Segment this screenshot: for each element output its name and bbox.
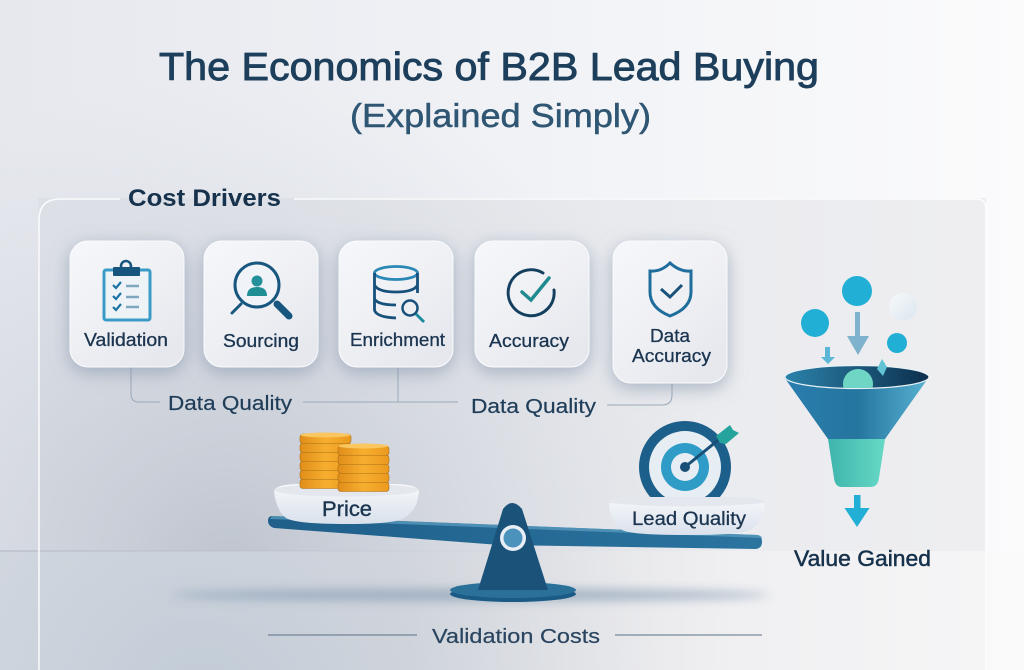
right pan [609, 497, 765, 535]
card: sourcing [204, 241, 318, 367]
label: data quality right: Data Quality [471, 396, 596, 418]
card: validation [70, 241, 184, 367]
scale [268, 421, 765, 602]
label: validation: Validation [84, 330, 168, 350]
falling diamond [877, 359, 887, 376]
label: data accuracy [632, 326, 711, 366]
panel: cost drivers frame [39, 199, 986, 670]
icon: shield check [650, 263, 691, 316]
icon: magnifier with person [232, 263, 289, 316]
label: data accuracy: Accuracy [632, 346, 711, 366]
fulcrum [478, 503, 548, 590]
arrows into funnel [821, 312, 869, 364]
funnel spout [828, 439, 885, 487]
label: accuracy: Accuracy [489, 331, 569, 351]
label: enrichment: Enrichment [350, 330, 445, 350]
subtitle: (Explained Simply) [350, 97, 651, 134]
connector lines [131, 367, 672, 405]
funnel group [784, 276, 929, 527]
scale beam [268, 516, 762, 549]
label: value gained: Value Gained [794, 546, 931, 571]
coin stacks [300, 432, 389, 492]
card: data accuracy [613, 241, 727, 383]
fulcrum base [450, 582, 576, 602]
left pan [274, 484, 419, 524]
label: data accuracy: Data [650, 326, 691, 346]
target icon [639, 421, 739, 513]
heading: cost drivers: Cost Drivers [128, 185, 281, 212]
funnel mouth [784, 366, 929, 390]
label: price: Price [322, 498, 372, 521]
label: sourcing: Sourcing [223, 331, 299, 351]
card: enrichment [339, 241, 453, 367]
card: accuracy [475, 241, 589, 367]
funnel cone [784, 377, 929, 439]
output arrow [844, 495, 870, 527]
title: The Economics of B2B Lead Buying [159, 46, 819, 89]
label: lead quality: Lead Quality [632, 508, 746, 530]
label: data quality left: Data Quality [168, 393, 292, 415]
icon: clipboard checklist [104, 261, 150, 320]
icon: check circle [508, 270, 554, 316]
floor shadow [170, 589, 770, 601]
falling circles [801, 276, 917, 353]
label: validation costs: Validation Costs [432, 626, 600, 648]
icon: database with magnifier [374, 266, 424, 322]
pivot [500, 525, 526, 551]
